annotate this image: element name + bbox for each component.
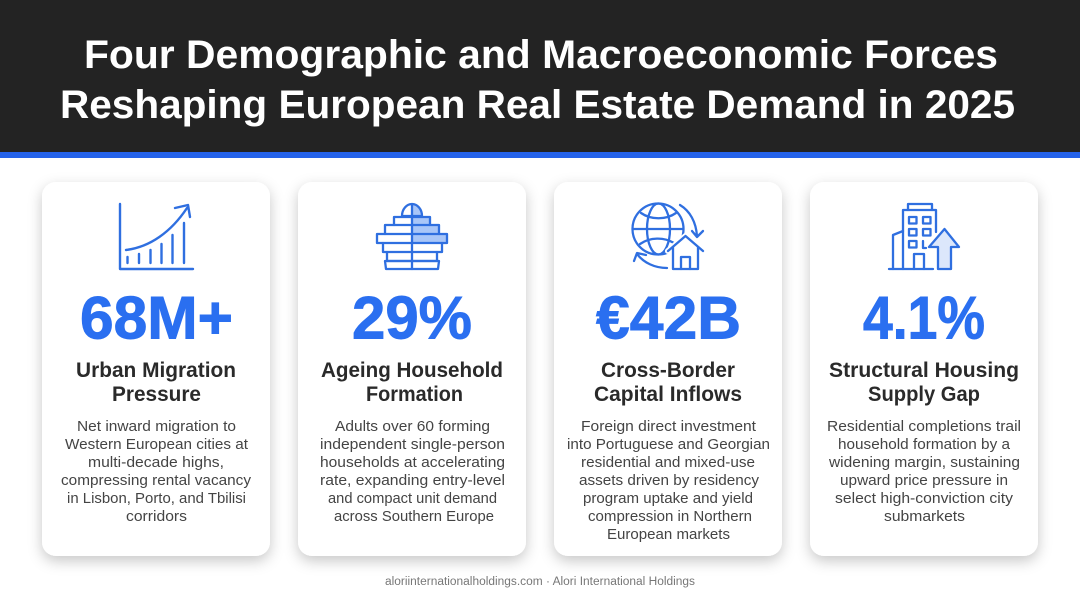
- text: ageing household description: [320, 419, 505, 525]
- text: housing supply description: household formation by a: [838, 437, 1011, 453]
- text: housing supply description: [827, 419, 1021, 525]
- text: urban migration description: multi-decade highs,: [88, 455, 224, 471]
- icon: building with up arrow: [889, 204, 959, 269]
- icon: globe and house: [632, 204, 703, 269]
- text: ageing household description: rate, expanding entry-level: [320, 473, 505, 489]
- heading: ageing household formation: Ageing Household: [321, 359, 503, 382]
- stat: €42B: €42B: [596, 284, 741, 352]
- text: ageing household description: independent single-person: [320, 437, 505, 453]
- text: cross-border description: European markets: [607, 527, 730, 543]
- icon: population pyramid: [377, 204, 447, 269]
- footer: aloriinternationalholdings.com · Alori International Holdings: [385, 576, 695, 588]
- text: urban migration description: corridors: [126, 509, 187, 525]
- stat: 29%: 29%: [352, 284, 472, 352]
- header band: [0, 0, 1080, 158]
- heading: urban migration pressure: [76, 359, 236, 406]
- text: cross-border description: compression in Northern: [588, 509, 752, 525]
- text: housing supply description: select high-conviction city: [835, 491, 1014, 507]
- stat: 68M+: 68M+: [80, 284, 233, 352]
- text: ageing household description: across Southern Europe: [334, 509, 494, 525]
- text: ageing household description: households at accelerating: [320, 455, 505, 471]
- text: cross-border description: into Portuguese and Georgian: [567, 437, 770, 453]
- text: housing supply description: upward price pressure in: [840, 473, 1008, 489]
- heading: urban migration pressure: Pressure: [112, 383, 201, 406]
- text: ageing household description: Adults over 60 forming: [335, 419, 490, 435]
- text: urban migration description: compressing rental vacancy: [61, 473, 252, 489]
- panel: urban migration: [42, 182, 270, 556]
- heading: structural housing supply gap: [829, 359, 1019, 406]
- heading: structural housing supply gap: Supply Gap: [868, 383, 980, 406]
- text: ageing household description: and compact unit demand: [328, 491, 497, 507]
- text: cross-border description: residential and mixed-use: [581, 455, 755, 471]
- panel: ageing household: [298, 182, 526, 556]
- text: housing supply description: widening margin, sustaining: [828, 455, 1020, 471]
- title: [60, 33, 1015, 127]
- text: urban migration description: Net inward migration to: [77, 419, 236, 435]
- title: Reshaping European Real Estate Demand in 2025: [60, 83, 1015, 127]
- heading: structural housing supply gap: Structural Housing: [829, 359, 1019, 382]
- panel: housing supply gap: [810, 182, 1038, 556]
- heading: urban migration pressure: Urban Migration: [76, 359, 236, 382]
- heading: ageing household formation: [321, 359, 503, 406]
- panel: cross-border capital: [554, 182, 782, 556]
- icon: growth chart: [120, 204, 193, 269]
- text: cross-border description: [567, 419, 770, 543]
- text: housing supply description: Residential completions trail: [827, 419, 1021, 435]
- heading: cross-border capital inflows: Capital Inflows: [594, 383, 742, 406]
- heading: cross-border capital inflows: [594, 359, 742, 406]
- text: housing supply description: submarkets: [884, 509, 965, 525]
- heading: ageing household formation: Formation: [366, 383, 463, 406]
- text: urban migration description: in Lisbon, Porto, and Tbilisi: [67, 491, 246, 507]
- heading: cross-border capital inflows: Cross-Border: [601, 359, 735, 382]
- stat: 4.1%: 4.1%: [863, 284, 985, 352]
- text: urban migration description: [61, 419, 252, 525]
- text: cross-border description: program uptake and yield: [583, 491, 753, 507]
- text: cross-border description: assets driven by residency: [579, 473, 760, 489]
- title: Four Demographic and Macroeconomic Forces: [84, 33, 998, 77]
- text: cross-border description: Foreign direct investment: [581, 419, 756, 435]
- text: urban migration description: Western European cities at: [65, 437, 248, 453]
